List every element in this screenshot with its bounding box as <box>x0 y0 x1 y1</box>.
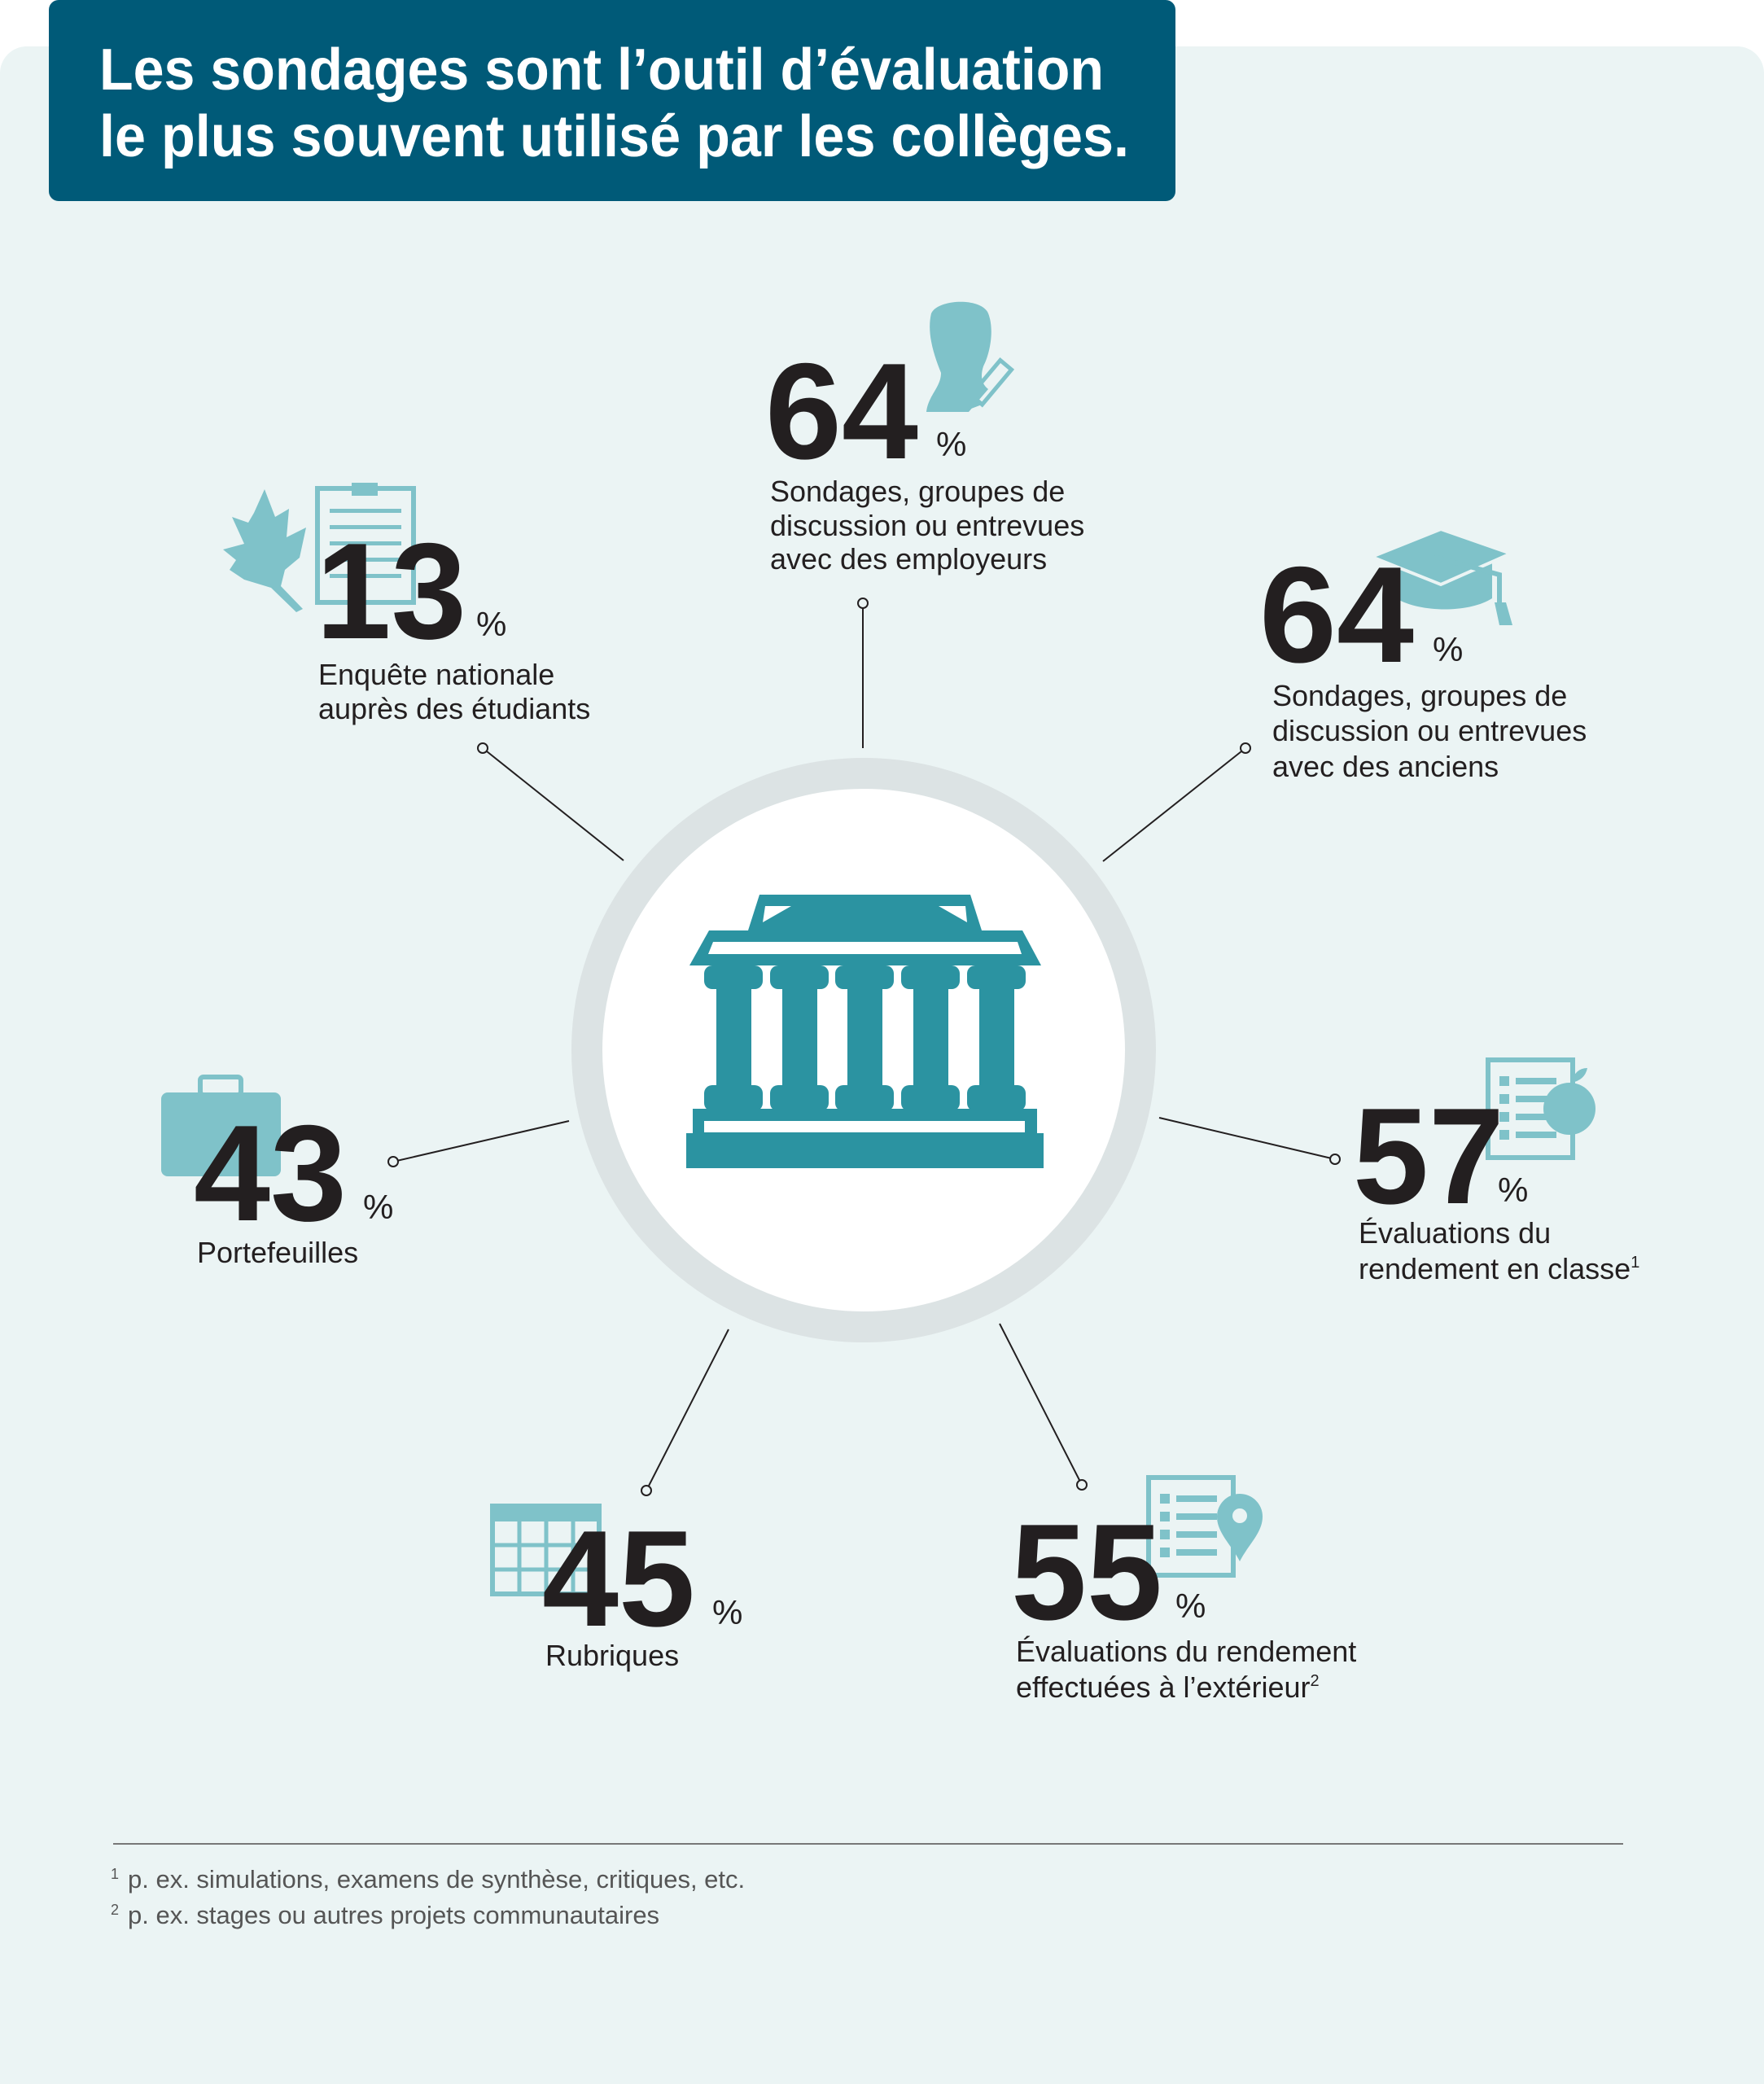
stat: 13% national survey <box>223 483 590 725</box>
label: employers: discussion ou entrevues <box>770 509 1084 542</box>
label: external: Évaluations du rendement <box>1016 1635 1356 1668</box>
label: classroom: rendement en classe <box>1359 1252 1630 1285</box>
central circle with college icon <box>587 773 1140 1327</box>
stat: 45% rubrics: % <box>712 1593 742 1631</box>
connector lines <box>388 598 1340 1495</box>
label: national survey: auprès des étudiants <box>318 692 590 725</box>
stat: 13% national survey: 13 <box>316 514 466 668</box>
footnote rule <box>113 1843 1623 1845</box>
footnotes: p. ex. stages ou autres projets communautaires <box>128 1901 659 1929</box>
icon: briefcase <box>161 1077 281 1176</box>
stat: 43% portfolios <box>161 1077 393 1269</box>
stat: 43% portfolios: 43 <box>194 1097 347 1250</box>
title banner: le plus souvent utilisé par les collèges. <box>99 104 1129 169</box>
title banner <box>49 0 1175 201</box>
icon: calendar grid <box>491 1504 601 1594</box>
label: employers: Sondages, groupes de <box>770 475 1065 508</box>
footnotes: 2 <box>111 1902 119 1918</box>
stat: 57% classroom: 57 <box>1353 1079 1504 1232</box>
label: classroom: Évaluations du <box>1359 1216 1551 1250</box>
label: alumni: Sondages, groupes de <box>1272 679 1567 712</box>
label: employers: avec des employeurs <box>770 542 1047 576</box>
icon: people with pencil <box>926 302 1012 414</box>
icon: list with location pin <box>1149 1478 1263 1575</box>
icon: graduation cap <box>1372 529 1512 625</box>
icon: checklist with apple <box>1488 1060 1595 1158</box>
stat: 64% employers: 64 <box>765 335 918 488</box>
icon: college building <box>686 895 1044 1168</box>
stat: 64% employers <box>765 302 1084 576</box>
stat: 57% classroom <box>1353 1060 1639 1285</box>
label: rubrics: Rubriques <box>545 1639 679 1672</box>
footnotes: p. ex. simulations, examens de synthèse, critiques, etc. <box>128 1865 745 1894</box>
stat: 55% external: 55 <box>1011 1495 1162 1648</box>
stat: 43% portfolios: % <box>363 1188 393 1226</box>
footnotes <box>111 1865 745 1929</box>
icon: maple leaf <box>223 489 306 612</box>
footnotes: 1 <box>111 1866 119 1882</box>
label: alumni: discussion ou entrevues <box>1272 714 1587 747</box>
stat: 64% alumni: 64 <box>1259 538 1414 691</box>
label: external: 2 <box>1311 1672 1320 1690</box>
stat: 45% rubrics <box>491 1502 742 1672</box>
stat: 57% classroom: % <box>1498 1171 1528 1209</box>
stat: 45% rubrics: 45 <box>542 1502 695 1655</box>
stat: 55% external <box>1011 1478 1356 1704</box>
label: alumni: avec des anciens <box>1272 750 1499 783</box>
stat: 64% employers: % <box>936 425 966 463</box>
label: portfolios: Portefeuilles <box>197 1236 358 1269</box>
label: external: effectuées à l’extérieur <box>1016 1670 1311 1704</box>
stat: 55% external: % <box>1175 1587 1206 1625</box>
icon: clipboard <box>317 483 414 602</box>
stat: 13% national survey: % <box>476 605 506 643</box>
label: classroom: 1 <box>1630 1254 1639 1272</box>
title banner: Les sondages sont l’outil d’évaluation <box>99 37 1104 103</box>
stat: 64% alumni: % <box>1433 630 1463 668</box>
stat: 64% alumni <box>1259 529 1587 783</box>
label: national survey: Enquête nationale <box>318 658 554 691</box>
